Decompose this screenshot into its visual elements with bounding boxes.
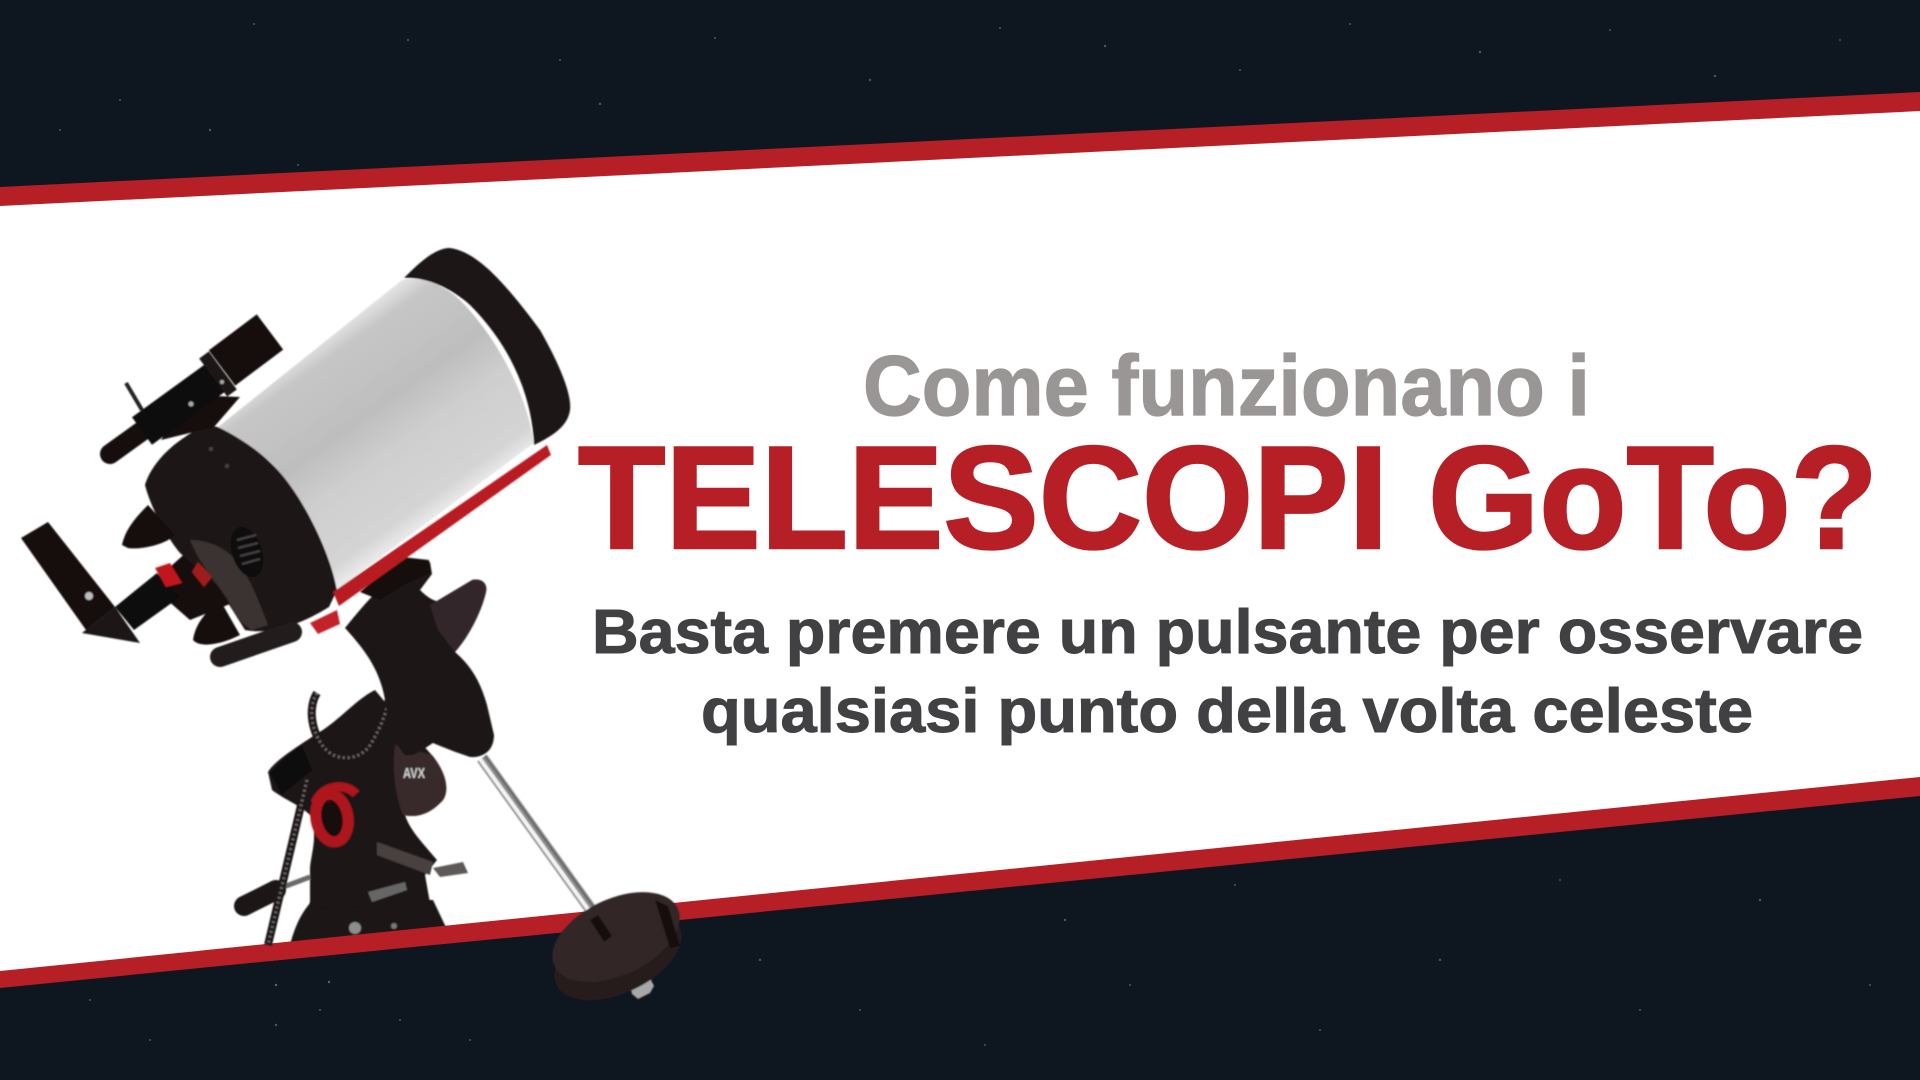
dew shield [404, 248, 570, 445]
finder scope [110, 332, 270, 454]
main title: TELESCOPI GoTo? [578, 416, 1878, 579]
vent grille [225, 523, 269, 581]
telescope: mount legs behind bottom band [286, 900, 452, 960]
rear knob upper [122, 505, 175, 548]
telescope [21, 248, 695, 1018]
rear knob lower [193, 600, 240, 645]
subtitle line 1: Basta premere un pulsante per osservare [592, 598, 1863, 667]
declination housing [345, 562, 494, 757]
optical tube [218, 279, 534, 590]
star diagonal and eyepiece [21, 522, 212, 643]
bottom red band overlay near telescope [200, 904, 660, 968]
hand controller cable [268, 680, 392, 945]
focuser [150, 540, 240, 620]
rear cell highlight [190, 540, 268, 630]
counterweight [538, 874, 695, 1018]
mount body [268, 690, 446, 907]
stars beneath telescope base [275, 981, 330, 986]
red dovetail rail [333, 445, 551, 606]
lower red rail piece [310, 610, 340, 634]
dark area overlay under the band near telescope [200, 923, 660, 1000]
white diagonal panel [0, 111, 1920, 971]
mount lettering: AVX [403, 765, 425, 782]
red altitude knob [312, 787, 356, 844]
saddle handle [430, 580, 486, 652]
pre-title: Come funzionano i [863, 339, 1590, 434]
dovetail clamp [360, 557, 430, 600]
latitude bolt [433, 862, 468, 877]
rear cell body [145, 427, 337, 631]
subtitle line 2: qualsiasi punto della volta celeste [701, 677, 1753, 746]
azimuth handle [244, 877, 310, 906]
rear handle bar [220, 632, 292, 657]
counterweight rod [480, 756, 600, 919]
rear cell screws [209, 447, 229, 468]
